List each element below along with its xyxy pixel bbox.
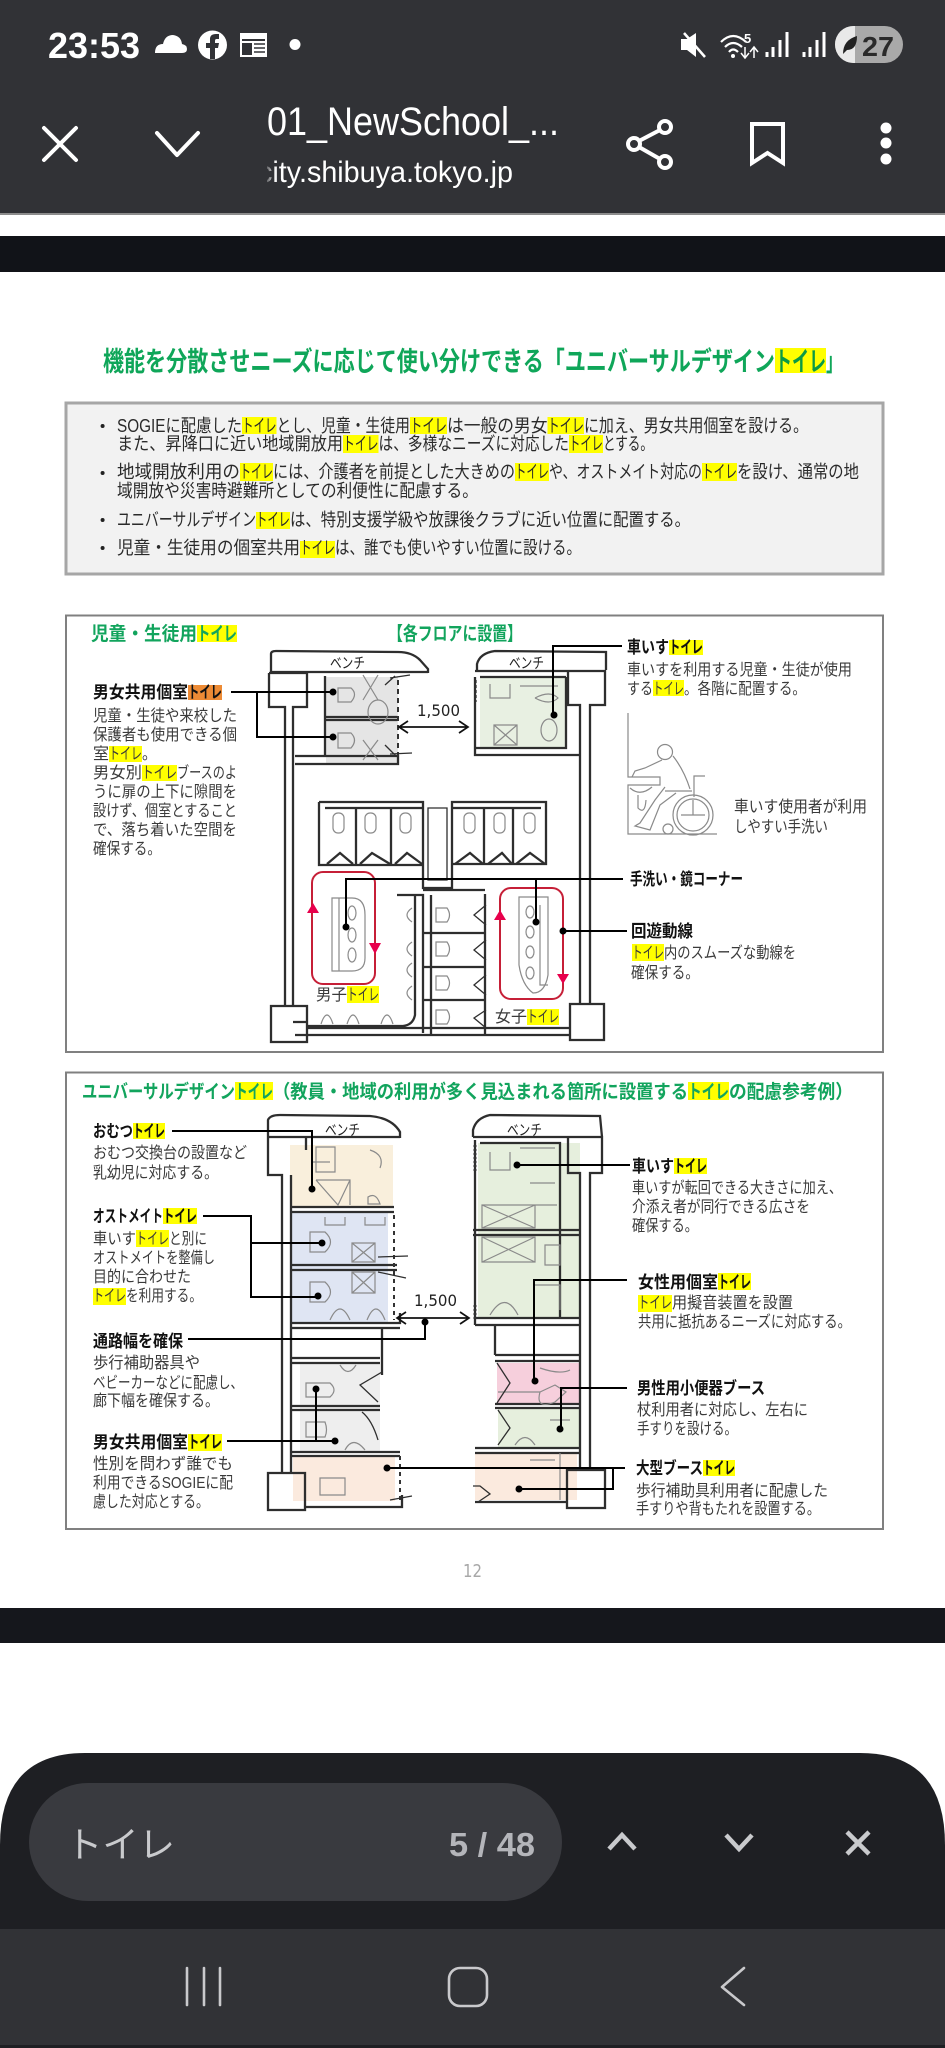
callout: wheelchair toilet: 車いすを利用する児童・生徒が使用	[627, 661, 852, 679]
icon: previous match	[609, 1835, 635, 1849]
central stalls	[319, 802, 546, 888]
callout: shared rooms: トイレ	[188, 1433, 222, 1452]
leader lines: universal panel	[172, 1131, 630, 1492]
icon: wifi 5G	[721, 31, 758, 58]
callout: shared rooms: トイレ	[188, 683, 222, 702]
floor plan: universal toilets	[268, 1115, 605, 1510]
callout: shared rooms: 室	[93, 745, 109, 763]
callout: shared rooms: 慮した対応とする。	[93, 1493, 209, 1511]
document title: 01_NewSchool_...	[267, 100, 559, 144]
panel heading	[82, 1080, 853, 1103]
callout: large booth: 大型ブース	[636, 1458, 703, 1478]
title: 」	[826, 347, 842, 377]
callout: wheelchair toilet: トイレ	[653, 681, 684, 698]
label: girls toilet: 女子	[495, 1008, 527, 1026]
callout: ostomate toilet: オストメイト	[93, 1207, 163, 1226]
bench label right: ベンチ	[509, 655, 544, 672]
bullet 1: は一般の男女	[447, 416, 548, 436]
callout: wheelchair toilet: 確保する。	[632, 1217, 698, 1235]
icon: next match	[726, 1835, 752, 1849]
floor plan: student toilets	[269, 651, 606, 1042]
callout: diaper toilet: おむつ	[93, 1122, 133, 1141]
bullet 3	[101, 509, 690, 530]
bullet 1: とする。	[603, 434, 653, 454]
bullet 1: トイレ	[242, 416, 276, 436]
callout: wheelchair toilet: 車いす	[627, 638, 669, 657]
callout: male urinal booth	[637, 1378, 808, 1438]
match count: 5 / 48	[449, 1826, 535, 1863]
callout: wheelchair toilet: トイレ	[674, 1157, 707, 1176]
dimension 1500: 1,500	[417, 701, 460, 720]
callout: ostomate toilet: トイレ	[163, 1207, 197, 1226]
panel: student toilets	[66, 616, 883, 1052]
bullet 4: は、誰でも使いやすい位置に設ける。	[335, 538, 581, 558]
callout: diaper toilet: おむつ交換台の設置など	[93, 1144, 247, 1162]
callout: circulation: 回遊動線	[631, 921, 693, 941]
toilet block	[293, 890, 570, 1035]
icon: signal 2	[804, 32, 824, 57]
bullet 1: SOGIEに配慮した	[117, 416, 242, 436]
illustration: wheelchair user at sink	[628, 713, 717, 835]
label: boys toilet: 男子	[316, 986, 347, 1004]
bullet 4: 児童・生徒用の個室共用	[117, 538, 300, 558]
icon: facebook	[198, 30, 227, 60]
callout: ostomate toilet: トイレ	[93, 1288, 126, 1305]
bullet 2: トイレ	[515, 462, 549, 482]
callout: shared rooms: 確保する。	[93, 840, 161, 858]
callout: ostomate toilet: と別に	[169, 1230, 207, 1248]
coloured rooms	[290, 1145, 393, 1207]
bullet 1: トイレ	[569, 434, 603, 454]
floor note: 【各フロアに設置】	[388, 622, 522, 645]
icon: close	[44, 128, 76, 160]
bullet 3: トイレ	[256, 510, 290, 530]
left wing fixtures	[306, 1147, 385, 1495]
leader lines: student panel	[231, 646, 627, 934]
search sheet	[0, 1753, 945, 1930]
caption: hand wash: しやすい手洗い	[734, 818, 828, 836]
callout: diaper toilet: 乳幼児に対応する。	[93, 1164, 218, 1182]
bullet 1: は、多様なニーズに対応した	[378, 434, 569, 454]
panel heading: トイレ	[235, 1082, 273, 1103]
callout: large booth: トイレ	[703, 1459, 735, 1478]
bullet 2: を設け、通常の地	[737, 462, 859, 482]
left wing walls	[268, 1115, 400, 1510]
caption: hand wash	[734, 798, 867, 836]
bullet 2: 域開放や災害時避難所としての利便性に配慮する。	[117, 481, 478, 501]
status dot	[290, 39, 300, 50]
left hand-wash counter	[332, 898, 365, 971]
bullet 2: トイレ	[702, 462, 737, 482]
right wing fixtures	[490, 684, 558, 745]
label: girls toilet	[495, 1008, 559, 1026]
callout: wheelchair toilet: トイレ	[669, 638, 703, 657]
callout: shared rooms: 保護者も使用できる個	[93, 726, 237, 744]
bullet 1: トイレ	[548, 416, 584, 436]
icon: chevron down	[157, 133, 198, 155]
navigation bar	[0, 1929, 945, 2048]
callout: shared rooms: 性別を問わず誰でも	[93, 1455, 233, 1473]
callout: corridor width	[93, 1332, 243, 1410]
callout: male urinal booth: 男性用小便器ブース	[637, 1378, 765, 1398]
callout: circulation: トイレ	[632, 945, 664, 962]
bullet 1: トイレ	[343, 434, 378, 454]
bullet 1: に加え、男女共用個室を設ける。	[584, 416, 808, 436]
callout: wheelchair toilet	[632, 1157, 842, 1235]
icon: home	[449, 1968, 487, 2006]
panel heading: トイレ	[688, 1082, 729, 1103]
callout: male urinal booth: 杖利用者に対応し、左右に	[637, 1401, 808, 1419]
callout: shared rooms: 利用できるSOGIEに配	[93, 1474, 233, 1492]
callout: shared rooms: 男女共用個室	[93, 683, 188, 702]
callout: wheelchair toilet: 。各階に配置する。	[684, 680, 806, 698]
bullet 2: や、オストメイト対応の	[549, 462, 702, 482]
callout: female room: トイレ	[638, 1295, 672, 1312]
icon: muted speaker	[681, 33, 705, 57]
callout: wheelchair toilet: 介添え者が同行できる広さを	[632, 1198, 810, 1216]
document lower black band	[0, 1608, 945, 1643]
callout: shared rooms: うに扉の上下に隙間を	[93, 783, 237, 801]
bullet 3: は、特別支援学級や放課後クラブに近い位置に配置する。	[290, 509, 690, 530]
callout: corridor width: 廊下幅を確保する。	[93, 1392, 219, 1410]
icon: more menu	[880, 122, 892, 164]
panel: summary bullets	[66, 403, 883, 574]
callout: shared rooms: トイレ	[142, 765, 177, 782]
left wing fixtures	[338, 675, 378, 760]
callout: shared rooms: 男女共用個室	[93, 1433, 188, 1452]
callout: shared rooms: 男女別	[93, 764, 142, 782]
icon: bookmark	[752, 124, 783, 163]
callout: shared rooms: トイレ	[109, 746, 142, 763]
label: girls toilet: トイレ	[527, 1009, 559, 1026]
icon: share	[628, 121, 671, 168]
callout: shared rooms: 設けず、個室とすること	[93, 802, 237, 820]
search field	[29, 1783, 562, 1901]
caption: hand wash: 車いす使用者が利用	[734, 798, 867, 816]
right hand-wash counter	[519, 897, 548, 993]
panel: universal design toilets	[66, 1072, 883, 1529]
callout: shared rooms: 。	[142, 746, 157, 763]
title: 機能を分散させニーズに応じて使い分けできる「ユニバーサルデザイン	[103, 346, 775, 377]
document top black band	[0, 236, 945, 272]
callout: wheelchair toilet: する	[627, 680, 653, 698]
panel heading: トイレ	[197, 624, 237, 645]
bullet 1	[101, 416, 808, 454]
dimension 1500	[399, 701, 468, 733]
callout: wheelchair toilet	[627, 638, 852, 698]
dimension 1500: 1,500	[414, 1291, 457, 1310]
callout: wheelchair toilet: 車いすが転回できる大きさに加え、	[632, 1179, 842, 1197]
callout: ostomate toilet: を利用する。	[126, 1287, 202, 1305]
callout: male urinal booth: 手すりを設ける。	[637, 1420, 737, 1438]
icon: signal 1	[767, 32, 787, 57]
icon: calendar news	[240, 33, 267, 57]
bullet 2	[101, 462, 859, 501]
right wing fixtures	[482, 1148, 570, 1500]
icon: back	[722, 1968, 744, 2005]
callout: circulation: 確保する。	[631, 964, 699, 982]
callout: female room: 女性用個室	[638, 1273, 718, 1292]
bench label left: ベンチ	[325, 1122, 360, 1139]
callout: female room: トイレ	[718, 1273, 751, 1292]
callout: female room	[638, 1273, 851, 1331]
callout: shared rooms	[93, 683, 237, 858]
panel heading: ユニバーサルデザイン	[82, 1080, 235, 1103]
callout: ostomate toilet	[93, 1207, 215, 1305]
callout: diaper toilet	[93, 1122, 247, 1182]
bullet 4	[101, 538, 581, 558]
callout: shared rooms: で、落ち着いた空間を	[93, 821, 237, 839]
bullet 1: また、昇降口に近い地域開放用	[117, 434, 343, 454]
icon: cloud	[155, 35, 187, 53]
bullet 2: トイレ	[240, 462, 273, 482]
callout: wheelchair toilet: 車いす	[632, 1157, 674, 1176]
search term: トイレ	[66, 1824, 175, 1865]
title: トイレ	[775, 347, 826, 377]
callout: shared rooms: 児童・生徒や来校した	[93, 707, 237, 725]
circulation loop: girls	[494, 888, 569, 999]
left wing walls	[270, 651, 428, 673]
callout: female room: 用擬音装置を設置	[672, 1294, 793, 1312]
icon: close search	[847, 1832, 869, 1854]
bullet 2: には、介護者を前提とした大きめの	[273, 462, 515, 482]
callout: ostomate toilet: トイレ	[136, 1231, 169, 1248]
panel heading: （教員・地域の利用が多く見込まれる箇所に設置する	[273, 1080, 688, 1103]
icon: wifi 5G: 5	[744, 31, 751, 46]
dimension 1500	[397, 1291, 469, 1324]
callout: ostomate toilet: 目的に合わせた	[93, 1268, 191, 1286]
bullet 3: ユニバーサルデザイン	[117, 510, 256, 530]
callout: corridor width: 歩行補助器具や	[93, 1354, 200, 1372]
right wing walls	[475, 651, 606, 1040]
icon: recents	[187, 1968, 220, 2005]
status time: 23:53	[48, 25, 140, 66]
panel heading: の配慮参考例）	[729, 1081, 853, 1103]
bullet 1: トイレ	[410, 416, 447, 436]
callout: large booth: 歩行補助具利用者に配慮した	[636, 1482, 828, 1500]
callout: circulation: 内のスムーズな動線を	[664, 944, 796, 962]
callout: shared rooms	[93, 1433, 233, 1511]
callout: wash corner: 手洗い・鏡コーナー	[630, 869, 743, 889]
bullet 2: 地域開放利用の	[117, 462, 240, 482]
bench label left: ベンチ	[330, 655, 365, 672]
bullet 4: トイレ	[300, 538, 335, 558]
callout: diaper toilet: トイレ	[133, 1122, 165, 1141]
callout: large booth: 手すりや背もたれを設置する。	[636, 1500, 820, 1518]
callout: corridor width: 通路幅を確保	[93, 1332, 183, 1351]
bullet 1: とし、児童・生徒用	[276, 416, 410, 436]
page number: 12	[463, 1561, 482, 1582]
callout: large booth	[636, 1458, 828, 1518]
circulation loop: boys	[307, 872, 381, 984]
callout: corridor width: ベビーカーなどに配慮し、	[93, 1374, 243, 1392]
phone top bar	[0, 0, 945, 215]
callout: shared rooms: ブースのよ	[177, 763, 237, 782]
battery pill: 27	[862, 31, 894, 62]
right wing walls	[473, 1115, 605, 1508]
battery pill	[835, 26, 903, 63]
bench label right: ベンチ	[507, 1122, 542, 1139]
callout: ostomate toilet: オストメイトを整備し	[93, 1249, 215, 1267]
room fills	[326, 677, 398, 764]
document url: city.shibuya.tokyo.jp	[258, 156, 513, 189]
panel heading: 児童・生徒用	[91, 623, 197, 645]
label: boys toilet	[316, 986, 379, 1004]
callout: ostomate toilet: 車いす	[93, 1230, 136, 1248]
callout: female room: 共用に抵抗あるニーズに対応する。	[638, 1313, 851, 1331]
label: boys toilet: トイレ	[347, 987, 379, 1004]
callout: circulation	[631, 921, 796, 982]
